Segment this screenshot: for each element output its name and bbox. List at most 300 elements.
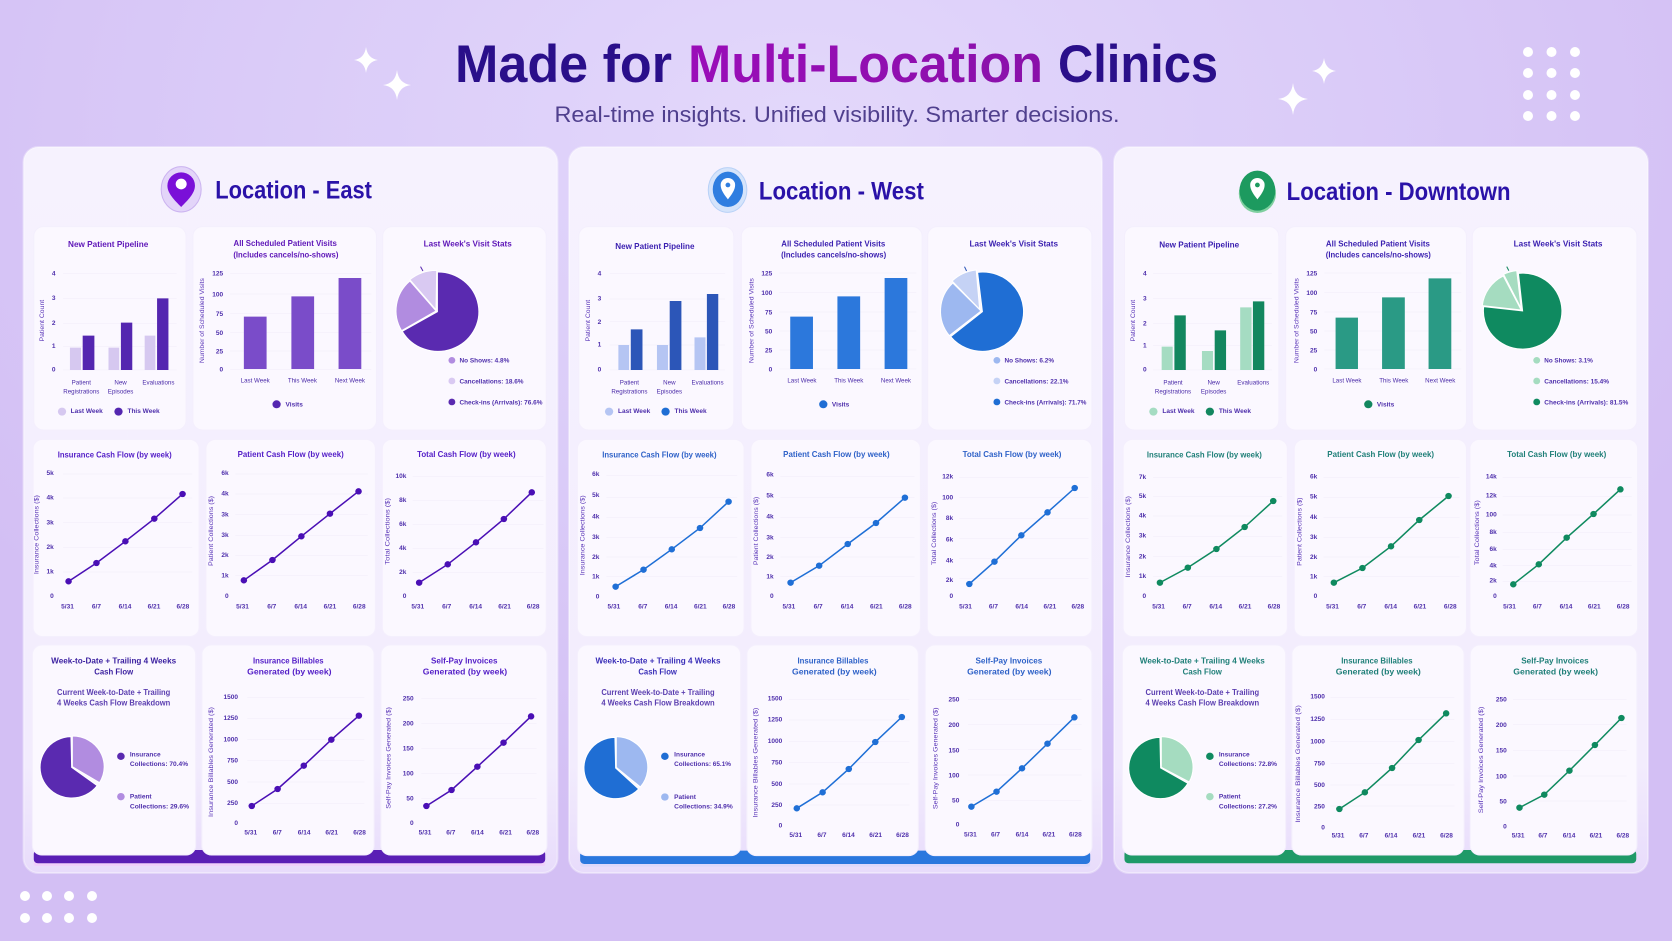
accent bar <box>34 850 545 863</box>
chart: Total Cash Flow: 2k <box>399 569 407 576</box>
chart: New Patient Pipeline: New Patient Pipeline <box>68 239 149 249</box>
chart: Insurance Cash Flow: 4k <box>1139 513 1147 520</box>
chart: Insurance Billables <box>202 645 374 855</box>
chart: New Patient Pipeline: Episodes <box>1201 389 1226 396</box>
chart: New Patient Pipeline: 0 <box>598 366 602 373</box>
chart: Insurance Billables: 1500 <box>1310 694 1325 701</box>
chart: Self-Pay Invoices: 5/31 <box>419 830 432 837</box>
chart: Insurance Cash Flow: Insurance Cash Flow (by week) <box>1147 449 1262 459</box>
chart: Self-Pay Invoices: 6/21 <box>1043 831 1056 838</box>
chart: New Patient Pipeline: Last Week <box>1162 408 1195 415</box>
chart: Insurance Cash Flow: 6/14 <box>665 603 678 610</box>
chart: New Patient Pipeline: This Week <box>127 408 160 415</box>
accent bar <box>580 851 1090 864</box>
chart: Self-Pay Invoices: 6/28 <box>526 830 540 837</box>
chart: Insurance Billables: 500 <box>1314 782 1325 789</box>
chart: All Scheduled Patient Visits: 100 <box>212 291 224 298</box>
chart: New Patient Pipeline: Evaluations <box>142 379 174 386</box>
chart: Self-Pay Invoices: 200 <box>948 722 960 729</box>
chart: Insurance Cash Flow: 5/31 <box>608 603 621 610</box>
chart: Total Cash Flow: 5/31 <box>411 603 425 610</box>
chart: Insurance Billables: 1000 <box>223 736 238 743</box>
chart: Patient Cash Flow: 6k <box>221 470 229 477</box>
chart: New Patient Pipeline <box>1124 227 1279 430</box>
chart: Total Cash Flow: 12k <box>942 473 954 480</box>
chart: Week-to-Date donut: 4 Weeks Cash Flow Breakdown <box>57 699 170 708</box>
chart: All Scheduled Patient Visits: 100 <box>1306 290 1318 297</box>
chart: Patient Cash Flow: 3k <box>1310 534 1318 541</box>
chart: New Patient Pipeline: Episodes <box>657 389 682 396</box>
chart: Self-Pay Invoices: 6/28 <box>1616 832 1630 839</box>
chart: Patient Cash Flow: 6/14 <box>1384 603 1397 610</box>
chart: Insurance Cash Flow: 7k <box>1139 474 1147 481</box>
chart: Insurance Billables: Generated (by week) <box>792 667 877 677</box>
chart: Insurance Billables: 1000 <box>768 738 783 745</box>
chart: Insurance Cash Flow: 1k <box>46 569 54 576</box>
chart: New Patient Pipeline: Patient Count <box>39 300 46 341</box>
chart: Self-Pay Invoices: 6/28 <box>1069 831 1082 838</box>
chart: Self-Pay Invoices: 6/14 <box>471 830 484 837</box>
chart: New Patient Pipeline: 1 <box>1143 343 1147 350</box>
chart: Insurance Cash Flow: Insurance Collections ($) <box>579 495 586 575</box>
chart: Total Cash Flow: 100 <box>942 494 954 501</box>
chart: Patient Cash Flow: 6/28 <box>899 603 912 610</box>
chart: Total Cash Flow: Total Cash Flow (by week) <box>417 449 516 459</box>
chart: Week-to-Date donut: Current Week-to-Date + Trailing <box>1145 688 1259 697</box>
chart: Patient Cash Flow: 4k <box>1310 514 1318 521</box>
chart: Total Cash Flow: Total Collections ($) <box>1474 500 1481 565</box>
chart: Self-Pay Invoices: Self-Pay Invoices <box>1521 656 1589 666</box>
chart: Total Cash Flow: 6k <box>1489 546 1497 553</box>
chart: Total Cash Flow: 6/7 <box>989 603 998 610</box>
chart: Insurance Cash Flow: 6/14 <box>1209 603 1223 610</box>
chart: Insurance Cash Flow: 4k <box>592 513 600 520</box>
chart: Insurance Cash Flow: 6/7 <box>1183 603 1192 610</box>
chart: Total Cash Flow: 6/28 <box>1617 603 1630 610</box>
chart: Insurance Billables: 750 <box>1314 760 1325 767</box>
chart: Total Cash Flow: 0 <box>403 593 407 600</box>
chart: Week-to-Date donut: Insurance <box>130 751 161 758</box>
icon: sparkles left <box>354 47 411 100</box>
chart: All Scheduled Patient Visits: This Week <box>1379 377 1409 384</box>
chart: Insurance Billables: 6/14 <box>842 832 855 839</box>
chart: Week-to-Date donut: Collections: 65.1% <box>674 761 731 768</box>
chart: Insurance Billables: 500 <box>227 779 238 786</box>
chart: Insurance Billables: 250 <box>227 800 238 807</box>
chart: Patient Cash Flow: 6/21 <box>1414 603 1427 610</box>
chart: All Scheduled Patient Visits: 75 <box>765 309 773 316</box>
chart: All Scheduled Patient Visits: Number of Scheduled Visits <box>199 278 206 363</box>
chart: Total Cash Flow: Total Cash Flow (by week) <box>963 449 1062 459</box>
chart: All Scheduled Patient Visits: 0 <box>220 367 224 374</box>
chart: Self-Pay Invoices: 150 <box>1496 748 1507 755</box>
chart: Insurance Cash Flow: 5k <box>592 492 600 499</box>
row: cash flow charts <box>1123 439 1638 637</box>
chart: New Patient Pipeline: This Week <box>1219 408 1251 415</box>
chart: All Scheduled Patient Visits: 25 <box>765 347 773 354</box>
chart: Self-Pay Invoices: Self-Pay Invoices Generated ($) <box>385 707 393 809</box>
chart: New Patient Pipeline: 0 <box>52 366 56 373</box>
chart: Insurance Cash Flow: 2k <box>46 544 54 551</box>
chart: Patient Cash Flow: Patient Collections ($) <box>753 497 760 565</box>
row: cash flow charts <box>33 439 546 637</box>
chart: Week-to-Date donut: Current Week-to-Date + Trailing <box>57 688 170 697</box>
title: Made for <box>455 35 672 94</box>
chart: Week-to-Date donut <box>577 645 741 856</box>
chart: Week-to-Date donut: 4 Weeks Cash Flow Breakdown <box>1145 699 1259 708</box>
chart: Insurance Cash Flow <box>1123 439 1287 637</box>
icon: pin purple <box>161 167 201 212</box>
chart: Total Cash Flow: 6k <box>399 521 407 528</box>
chart: Insurance Billables: 6/21 <box>1413 833 1426 840</box>
chart: All Scheduled Patient Visits: 100 <box>761 290 773 297</box>
chart: Patient Cash Flow: Patient Cash Flow (by week) <box>783 449 890 459</box>
chart: Self-Pay Invoices: 0 <box>1503 823 1507 830</box>
chart: New Patient Pipeline: 4 <box>52 271 56 278</box>
chart: All Scheduled Patient Visits: 50 <box>765 328 773 335</box>
chart: All Scheduled Patient Visits: All Scheduled Patient Visits <box>781 238 886 248</box>
row: bottom charts <box>577 645 1092 867</box>
chart: Total Cash Flow <box>1470 439 1638 637</box>
chart: Total Cash Flow: 2k <box>946 577 954 584</box>
chart: Insurance Cash Flow: 6/14 <box>119 603 132 610</box>
chart: Total Cash Flow: 6/21 <box>1044 603 1057 610</box>
dots top right <box>1523 47 1580 121</box>
chart: Insurance Cash Flow: 6/7 <box>638 603 648 610</box>
chart: Patient Cash Flow: 6/14 <box>294 603 307 610</box>
chart: New Patient Pipeline: Patient Count <box>585 300 592 341</box>
chart: All Scheduled Patient Visits: 0 <box>1314 366 1318 373</box>
chart: Insurance Cash Flow: 2k <box>1139 553 1147 560</box>
chart: All Scheduled Patient Visits: Next Week <box>881 377 912 384</box>
chart: Patient Cash Flow: 0 <box>1314 593 1318 600</box>
chart: Patient Cash Flow: 6/28 <box>1444 603 1457 610</box>
chart: Patient Cash Flow <box>1294 439 1466 637</box>
chart: Self-Pay Invoices: 150 <box>948 747 960 754</box>
chart: Total Cash Flow: Total Collections ($) <box>931 502 938 565</box>
chart: Insurance Cash Flow: 4k <box>46 495 54 502</box>
chart: Insurance Cash Flow: 6/21 <box>148 603 161 610</box>
chart: Total Cash Flow: 6/14 <box>1015 603 1028 610</box>
chart: All Scheduled Patient Visits: 50 <box>1310 328 1318 335</box>
chart: Week-to-Date donut: Collections: 27.2% <box>1219 803 1277 810</box>
chart: Insurance Cash Flow: 6/21 <box>1239 603 1252 610</box>
panel: Location Downtown <box>1114 147 1648 873</box>
chart: Self-Pay Invoices: 0 <box>956 821 960 828</box>
chart: New Patient Pipeline: 3 <box>598 296 602 303</box>
chart: All Scheduled Patient Visits: All Scheduled Patient Visits <box>234 238 337 248</box>
chart: Self-Pay Invoices: Self-Pay Invoices <box>976 656 1043 666</box>
chart: Total Cash Flow: 8k <box>399 497 407 504</box>
chart: Self-Pay Invoices: 6/7 <box>446 830 456 837</box>
chart: Self-Pay Invoices: 50 <box>406 796 414 803</box>
icon: pin blue <box>708 168 747 212</box>
chart: Patient Cash Flow: 3k <box>766 534 774 541</box>
chart: All Scheduled Patient Visits: Number of Scheduled Visits <box>749 278 756 363</box>
accent glow <box>34 861 545 866</box>
chart: Insurance Cash Flow <box>33 439 199 637</box>
chart: All Scheduled Patient Visits: 0 <box>769 366 773 373</box>
chart: Insurance Cash Flow: 2k <box>592 554 600 561</box>
chart: New Patient Pipeline: Last Week <box>71 408 103 415</box>
chart: New Patient Pipeline <box>34 227 186 430</box>
chart: Patient Cash Flow: 2k <box>221 552 229 559</box>
chart: Patient Cash Flow: 6/28 <box>353 603 366 610</box>
chart: Total Cash Flow: 6/21 <box>1588 603 1601 610</box>
chart: Insurance Billables: 5/31 <box>1332 833 1345 840</box>
chart: New Patient Pipeline: 2 <box>52 320 56 327</box>
chart: Week-to-Date donut: Patient <box>1219 794 1241 801</box>
chart: Insurance Cash Flow: Insurance Cash Flow (by week) <box>58 449 172 459</box>
chart: Total Cash Flow: 2k <box>1489 578 1497 585</box>
chart: New Patient Pipeline: Patient Count <box>1130 300 1137 341</box>
subtitle: Real-time insights. Unified visibility. Smarter decisions. <box>554 102 1120 127</box>
chart: Insurance Cash Flow: 6/28 <box>1268 603 1281 610</box>
chart: Last Week's Visit Stats <box>928 227 1092 430</box>
chart: Self-Pay Invoices: 5/31 <box>1512 832 1525 839</box>
chart: Insurance Cash Flow: Insurance Collections ($) <box>34 495 41 574</box>
chart: Total Cash Flow: 10k <box>396 473 407 480</box>
chart: All Scheduled Patient Visits: Last Week <box>1332 377 1362 384</box>
chart: Patient Cash Flow: Patient Cash Flow (by week) <box>238 449 344 459</box>
chart: Self-Pay Invoices: Self-Pay Invoices <box>431 656 498 666</box>
chart: Insurance Billables: Insurance Billables Generated ($) <box>208 707 215 817</box>
chart: Week-to-Date donut: Patient <box>674 794 697 801</box>
chart: New Patient Pipeline: Registrations <box>63 389 99 396</box>
chart: Insurance Billables: Generated (by week) <box>1336 667 1421 677</box>
chart: New Patient Pipeline: Last Week <box>618 408 651 415</box>
chart: Self-Pay Invoices: 150 <box>403 746 414 753</box>
title: Clinics <box>1058 35 1218 94</box>
chart: Insurance Cash Flow: 1k <box>1139 573 1147 580</box>
chart: Insurance Billables: Insurance Billables Generated ($) <box>1295 705 1302 823</box>
chart: New Patient Pipeline: 1 <box>52 343 56 350</box>
heading: Location - West <box>759 178 924 205</box>
chart: All Scheduled Patient Visits: 125 <box>212 271 224 278</box>
chart: New Patient Pipeline: Patient <box>72 379 91 386</box>
chart: Self-Pay Invoices: 250 <box>948 696 960 703</box>
chart: Insurance Cash Flow: 5/31 <box>1152 603 1165 610</box>
chart: Total Cash Flow <box>927 439 1092 637</box>
row: bottom charts <box>1122 645 1637 863</box>
chart: Patient Cash Flow: 0 <box>225 593 229 600</box>
title: Multi-Location <box>688 35 1043 94</box>
chart: Total Cash Flow: 14k <box>1486 473 1497 480</box>
chart: Last Week's Visit Stats: Last Week's Visit Stats <box>969 239 1058 249</box>
chart: Week-to-Date donut: Current Week-to-Date + Trailing <box>601 688 715 697</box>
chart: Patient Cash Flow: 6/21 <box>870 603 883 610</box>
chart: All Scheduled Patient Visits: (Includes cancels/no-shows) <box>781 250 886 260</box>
panel: Location West <box>569 147 1102 873</box>
chart: Last Week's Visit Stats: Cancellations: 18.6% <box>459 378 524 385</box>
chart: Week-to-Date donut: 4 Weeks Cash Flow Breakdown <box>601 699 715 708</box>
chart: Self-Pay Invoices: 250 <box>403 695 414 702</box>
chart: Last Week's Visit Stats: Last Week's Visit Stats <box>1514 239 1603 249</box>
chart: Insurance Billables: 1500 <box>768 695 783 702</box>
chart: Patient Cash Flow: 1k <box>766 574 774 581</box>
chart: New Patient Pipeline: 2 <box>598 319 602 326</box>
chart: Patient Cash Flow: 6/21 <box>324 603 337 610</box>
chart: Insurance Cash Flow: 6/28 <box>723 603 736 610</box>
row: cash flow charts <box>577 439 1092 637</box>
chart: Total Cash Flow: 6/7 <box>442 603 452 610</box>
chart: Patient Cash Flow: 6/14 <box>841 603 854 610</box>
chart: Insurance Cash Flow: 6/7 <box>92 603 101 610</box>
chart: Insurance Billables: 0 <box>234 820 238 827</box>
chart: All Scheduled Patient Visits: (Includes cancels/no-shows) <box>1326 250 1431 260</box>
chart: Insurance Billables: 6/28 <box>353 830 366 837</box>
chart: Self-Pay Invoices: 100 <box>948 773 960 780</box>
chart: Insurance Billables <box>1292 645 1464 855</box>
chart: All Scheduled Patient Visits: Visits <box>286 401 303 408</box>
chart: Last Week's Visit Stats: Check-ins (Arrivals): 76.6% <box>459 399 543 406</box>
chart: Last Week's Visit Stats: No Shows: 4.8% <box>459 357 510 364</box>
row: bottom charts <box>32 645 547 866</box>
chart: All Scheduled Patient Visits: This Week <box>288 377 318 384</box>
chart: Patient Cash Flow: 3k <box>221 532 229 539</box>
chart: Patient Cash Flow: 4k <box>766 514 774 521</box>
chart: All Scheduled Patient Visits <box>741 227 922 430</box>
chart: All Scheduled Patient Visits: 75 <box>1310 309 1318 316</box>
chart: All Scheduled Patient Visits: Visits <box>1377 401 1395 408</box>
chart: All Scheduled Patient Visits: 25 <box>1310 347 1318 354</box>
chart: New Patient Pipeline: 3 <box>1143 295 1147 302</box>
chart: Insurance Cash Flow: 3k <box>1139 533 1147 540</box>
chart: Week-to-Date donut: Insurance <box>1219 751 1250 758</box>
chart: All Scheduled Patient Visits: Last Week <box>787 377 817 384</box>
chart: All Scheduled Patient Visits: 50 <box>216 330 224 337</box>
chart: All Scheduled Patient Visits: (Includes cancels/no-shows) <box>233 249 339 259</box>
chart: New Patient Pipeline: Episodes <box>108 389 133 396</box>
chart: Patient Cash Flow: 6k <box>766 472 774 479</box>
chart: Total Cash Flow: 0 <box>950 593 954 600</box>
chart: Last Week's Visit Stats: Cancellations: 15.4% <box>1544 378 1609 385</box>
chart: Total Cash Flow: 6/14 <box>469 603 482 610</box>
chart: Self-Pay Invoices: Generated (by week) <box>423 667 507 677</box>
chart: All Scheduled Patient Visits: 25 <box>216 348 224 355</box>
chart: Week-to-Date donut: Cash Flow <box>1183 667 1222 677</box>
chart: All Scheduled Patient Visits: All Scheduled Patient Visits <box>1326 238 1430 248</box>
chart: All Scheduled Patient Visits <box>1286 227 1466 430</box>
chart: Self-Pay Invoices: 6/7 <box>991 831 1000 838</box>
chart: Insurance Billables: 6/21 <box>325 830 338 837</box>
chart: Insurance Billables: Insurance Billables <box>1341 656 1413 666</box>
chart: Insurance Cash Flow: Insurance Cash Flow (by week) <box>602 449 717 459</box>
chart: All Scheduled Patient Visits: Number of Scheduled Visits <box>1294 278 1301 363</box>
chart: Week-to-Date donut: Insurance <box>674 751 705 758</box>
chart: Self-Pay Invoices <box>1470 645 1637 855</box>
row: top charts <box>1124 171 1637 430</box>
chart: Total Cash Flow: 4k <box>1489 562 1497 569</box>
chart: Insurance Cash Flow <box>577 439 744 637</box>
chart: Total Cash Flow: 6/28 <box>527 603 540 610</box>
chart: New Patient Pipeline: Patient <box>620 379 639 386</box>
chart: Insurance Cash Flow: Insurance Collections ($) <box>1125 496 1132 577</box>
chart: All Scheduled Patient Visits: Next Week <box>335 377 366 384</box>
chart: New Patient Pipeline <box>579 227 734 430</box>
chart: Insurance Cash Flow: 5k <box>46 470 54 477</box>
chart: Insurance Billables: Insurance Billables Generated ($) <box>752 708 760 818</box>
chart: Patient Cash Flow: 5k <box>766 493 774 500</box>
chart: Total Cash Flow: 6/7 <box>1533 603 1542 610</box>
chart: Patient Cash Flow: 6k <box>1310 473 1318 480</box>
chart: Patient Cash Flow <box>751 439 920 637</box>
chart: New Patient Pipeline: Patient <box>1163 379 1183 386</box>
chart: Insurance Billables <box>747 645 918 856</box>
chart: All Scheduled Patient Visits: This Week <box>834 377 864 384</box>
chart: Insurance Billables: Insurance Billables <box>253 656 324 666</box>
chart: Total Cash Flow: 4k <box>399 545 407 552</box>
chart: Insurance Billables: 250 <box>771 802 783 809</box>
chart: Insurance Billables: Insurance Billables <box>797 656 869 666</box>
chart: Week-to-Date donut: Collections: 34.9% <box>674 804 733 811</box>
chart: All Scheduled Patient Visits <box>193 227 376 430</box>
chart: Total Cash Flow <box>382 439 546 637</box>
chart: Insurance Billables: 6/14 <box>1385 833 1398 840</box>
chart: Patient Cash Flow: 2k <box>766 554 774 561</box>
chart: New Patient Pipeline: Evaluations <box>1237 379 1269 386</box>
chart: Self-Pay Invoices: Self-Pay Invoices Generated ($) <box>1478 707 1485 813</box>
chart: Self-Pay Invoices: Self-Pay Invoices Generated ($) <box>932 707 939 809</box>
chart: Last Week's Visit Stats: Last Week's Visit Stats <box>424 238 512 248</box>
chart: Insurance Cash Flow: 6/28 <box>177 603 190 610</box>
chart: Patient Cash Flow: 6/7 <box>267 603 277 610</box>
chart: Patient Cash Flow: 5/31 <box>1326 603 1339 610</box>
chart: New Patient Pipeline: 3 <box>52 295 56 302</box>
chart: New Patient Pipeline: Evaluations <box>692 379 724 386</box>
chart: Self-Pay Invoices: 200 <box>1496 722 1507 729</box>
chart: Total Cash Flow: 5/31 <box>959 603 972 610</box>
chart: All Scheduled Patient Visits: 75 <box>216 311 224 318</box>
panel: Location East <box>24 147 558 873</box>
chart: Insurance Billables: 6/7 <box>817 832 827 839</box>
chart: Insurance Cash Flow: 6k <box>592 471 600 478</box>
chart: Insurance Cash Flow: 6/21 <box>694 603 707 610</box>
chart: Last Week's Visit Stats <box>383 227 546 430</box>
chart: Self-Pay Invoices: 6/14 <box>1016 831 1029 838</box>
chart: Total Cash Flow: Total Cash Flow (by week) <box>1507 449 1606 459</box>
chart: Insurance Billables: 750 <box>771 760 783 767</box>
chart: Insurance Billables: 750 <box>227 758 238 765</box>
chart: Week-to-Date donut <box>1122 645 1286 855</box>
chart: Insurance Billables: 0 <box>779 823 783 830</box>
chart: Insurance Billables: 6/14 <box>298 830 311 837</box>
chart: New Patient Pipeline: 4 <box>598 271 602 278</box>
chart: Last Week's Visit Stats: Check-ins (Arrivals): 81.5% <box>1544 399 1629 406</box>
heading: Location - Downtown <box>1287 178 1511 206</box>
icon: sparkles right <box>1278 58 1336 115</box>
chart: Insurance Billables: 500 <box>771 781 783 788</box>
chart: Total Cash Flow: Total Collections ($) <box>384 498 392 565</box>
chart: Self-Pay Invoices: 6/7 <box>1538 832 1548 839</box>
chart: Patient Cash Flow: 5/31 <box>783 603 796 610</box>
chart: Insurance Billables: 6/7 <box>1359 833 1369 840</box>
heading: Location - East <box>215 177 372 204</box>
chart: Week-to-Date donut: Collections: 70.4% <box>130 761 188 768</box>
chart: Insurance Billables: 250 <box>1314 803 1325 810</box>
chart: Insurance Billables: 6/7 <box>273 830 282 837</box>
title <box>455 35 1218 94</box>
chart: Last Week's Visit Stats: No Shows: 3.1% <box>1544 357 1593 364</box>
chart: Insurance Billables: 0 <box>1321 824 1325 831</box>
chart: New Patient Pipeline: New <box>114 379 127 386</box>
chart: Patient Cash Flow: 6/7 <box>814 603 823 610</box>
chart: Insurance Billables: Generated (by week) <box>247 667 332 677</box>
chart: All Scheduled Patient Visits: 125 <box>1306 270 1318 277</box>
chart: Week-to-Date donut: Week-to-Date + Trailing 4 Weeks <box>595 656 721 666</box>
chart: Insurance Cash Flow: 1k <box>592 574 600 581</box>
chart: Week-to-Date donut: Cash Flow <box>638 667 677 677</box>
